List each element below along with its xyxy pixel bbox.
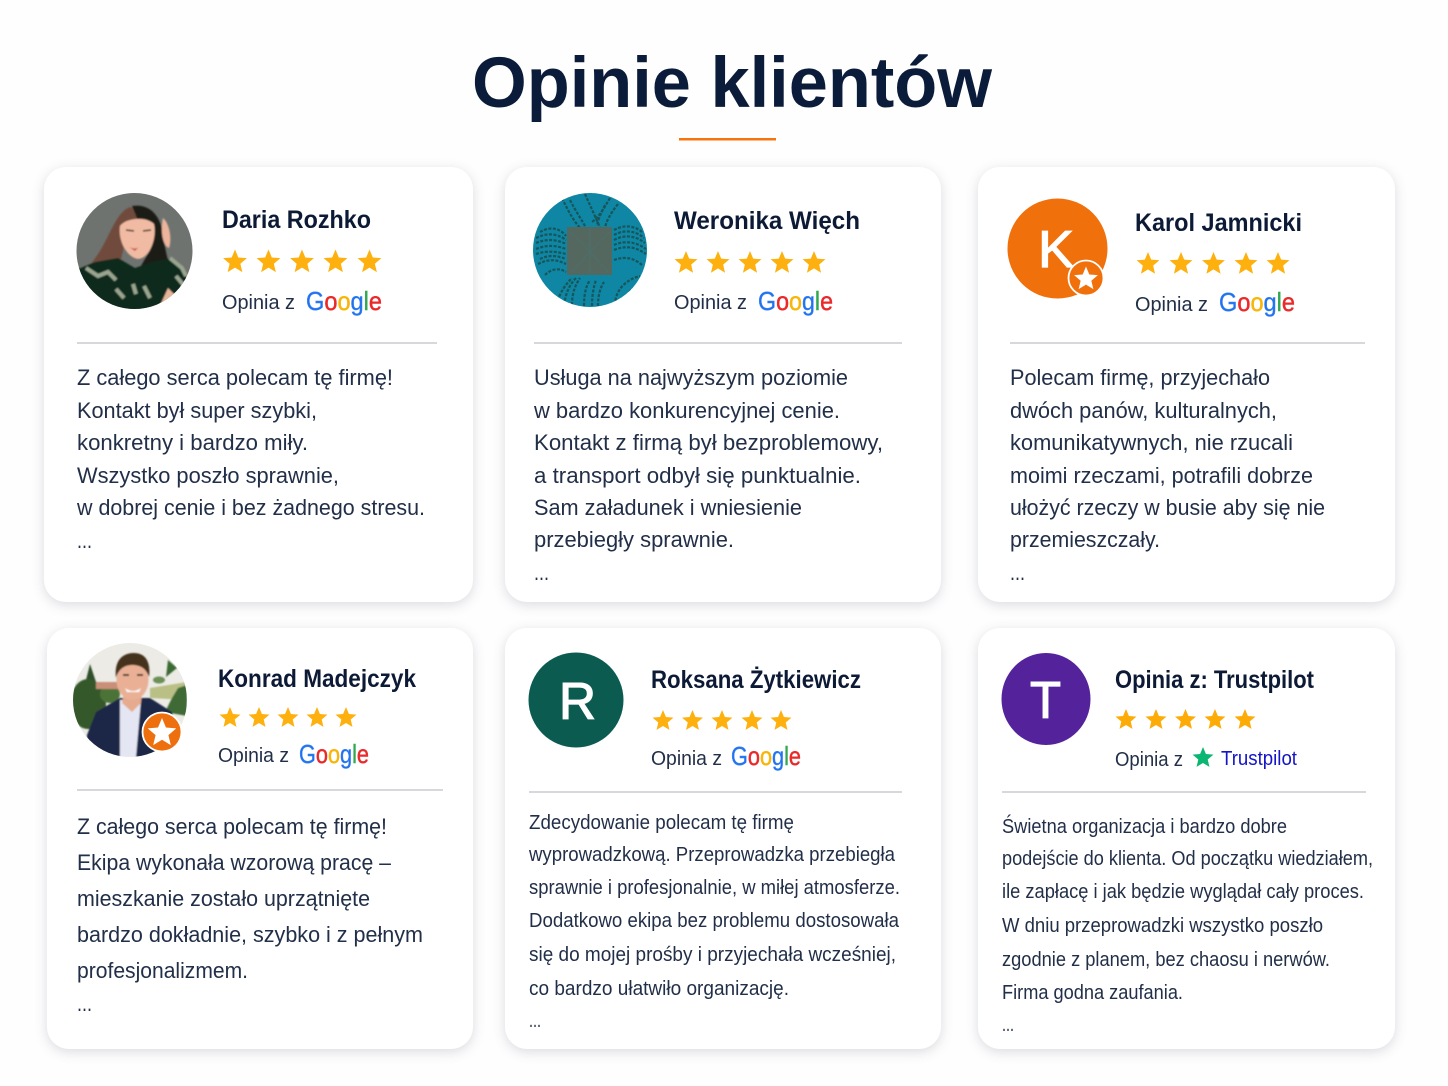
review text: Usługa na najwyższym poziomie — [534, 365, 848, 390]
rating stars — [1116, 709, 1255, 729]
title: Opinie klientów — [472, 44, 993, 123]
avatar: letter T: T — [1030, 672, 1061, 730]
review text: a transport odbył się punktualnie. — [534, 463, 861, 488]
reviewer name: Weronika Więch — [674, 207, 860, 235]
review text: się do mojej prośby i przyjechała wcześniej, — [529, 944, 896, 966]
review text: podejście do klienta. Od początku wiedziałem, — [1002, 848, 1373, 870]
panel: review Konrad Madejczyk — [47, 628, 473, 1049]
review text: przemieszczały. — [1010, 527, 1160, 552]
review text: Świetna organizacja i bardzo dobre — [1002, 814, 1287, 838]
review text — [1010, 365, 1325, 585]
review text: Z całego serca polecam tę firmę! — [77, 814, 387, 839]
review text: mieszkanie zostało uprzątnięte — [77, 886, 370, 911]
source label: Opinia z — [1115, 749, 1183, 771]
review text: w bardzo konkurencyjnej cenie. — [533, 398, 840, 423]
review text: Kontakt był super szybki, — [77, 398, 317, 423]
review text — [533, 365, 883, 585]
rating stars — [223, 250, 381, 272]
review text: przebiegły sprawnie. — [534, 527, 734, 552]
reviewer name: Konrad Madejczyk — [218, 665, 416, 693]
review text — [76, 365, 425, 553]
avatar: letter K: K — [1038, 221, 1074, 279]
review text — [1002, 814, 1373, 1036]
rating stars — [653, 710, 791, 730]
review text: komunikatywnych, nie rzucali — [1010, 430, 1293, 455]
review text — [77, 814, 423, 1016]
review text: co bardzo ułatwiło organizację. — [529, 978, 789, 1000]
panel: review Weronika Więch — [505, 167, 941, 602]
review text: w dobrej cenie i bez żadnego stresu. — [76, 495, 425, 520]
avatar: letter R: R — [559, 673, 596, 731]
review text: zgodnie z planem, bez chaosu i nerwów. — [1002, 949, 1330, 971]
review text: Z całego serca polecam tę firmę! — [77, 365, 393, 390]
reviewer name: Daria Rozhko — [222, 206, 371, 234]
title underline — [679, 138, 776, 140]
review text: ... — [1010, 560, 1025, 585]
source label: Opinia z — [222, 292, 295, 314]
avatar: letter R — [528, 652, 624, 748]
review text: Sam załadunek i wniesienie — [534, 495, 802, 520]
review text: wyprowadzkową. Przeprowadzka przebiegła — [528, 844, 896, 866]
review text: ... — [77, 528, 92, 553]
review text: Polecam firmę, przyjechało — [1010, 365, 1270, 390]
review text: Dodatkowo ekipa bez problemu dostosowała — [529, 910, 900, 932]
rating stars — [220, 707, 356, 727]
rating stars — [675, 251, 825, 273]
source label: Opinia z — [1135, 294, 1208, 316]
review text: ... — [529, 1010, 541, 1032]
Google logo: Google — [758, 286, 833, 316]
Google logo: Google — [731, 741, 801, 771]
review text: ile zapłacę i jak będzie wyglądał cały proces. — [1002, 881, 1364, 903]
source label: Opinia z — [651, 748, 722, 770]
review text: ... — [1002, 1014, 1014, 1036]
panel: review Trustpilot — [978, 628, 1395, 1049]
review text: bardzo dokładnie, szybko i z pełnym — [77, 922, 423, 947]
panel: review Karol Jamnicki — [978, 167, 1395, 602]
review text: ... — [534, 560, 549, 585]
Google logo: Google — [1219, 287, 1295, 317]
review text: W dniu przeprowadzki wszystko poszło — [1002, 915, 1323, 937]
icon: Trustpilot star — [1193, 747, 1213, 767]
review text: Kontakt z firmą był bezproblemowy, — [534, 430, 883, 455]
review text: profesjonalizmem. — [77, 958, 248, 983]
reviewer name: Karol Jamnicki — [1135, 209, 1302, 237]
review text: ... — [77, 991, 92, 1016]
Google logo: Google — [299, 739, 369, 769]
avatar: Konrad photo — [70, 643, 187, 757]
review text: ułożyć rzeczy w busie aby się nie — [1010, 495, 1325, 520]
reviewer name: Opinia z: Trustpilot — [1115, 666, 1315, 694]
review text — [528, 812, 900, 1032]
source label: Opinia z — [674, 292, 747, 314]
review text: Zdecydowanie polecam tę firmę — [529, 812, 794, 834]
avatar: letter T — [1002, 653, 1090, 745]
panel: review Roksana Żytkiewicz — [505, 628, 941, 1049]
review text: Wszystko poszło sprawnie, — [77, 463, 339, 488]
review text: moimi rzeczami, potrafili dobrze — [1010, 463, 1313, 488]
avatar: Daria photo — [76, 193, 194, 312]
review text: Ekipa wykonała wzorową pracę – — [77, 850, 392, 875]
review text: Firma godna zaufania. — [1002, 982, 1183, 1004]
Trustpilot wordmark: Trustpilot — [1221, 748, 1297, 770]
rating stars — [1137, 252, 1289, 274]
avatar: letter K — [1008, 198, 1108, 298]
panel: review Daria Rozhko — [44, 167, 473, 602]
avatar: Weronika pattern — [533, 193, 647, 307]
review text: sprawnie i profesjonalnie, w miłej atmosferze. — [529, 877, 900, 899]
review text: konkretny i bardzo miły. — [77, 430, 308, 455]
Google logo: Google — [306, 286, 382, 316]
source label: Opinia z — [218, 745, 289, 767]
reviewer name: Roksana Żytkiewicz — [651, 666, 861, 694]
review text: dwóch panów, kulturalnych, — [1010, 398, 1277, 423]
